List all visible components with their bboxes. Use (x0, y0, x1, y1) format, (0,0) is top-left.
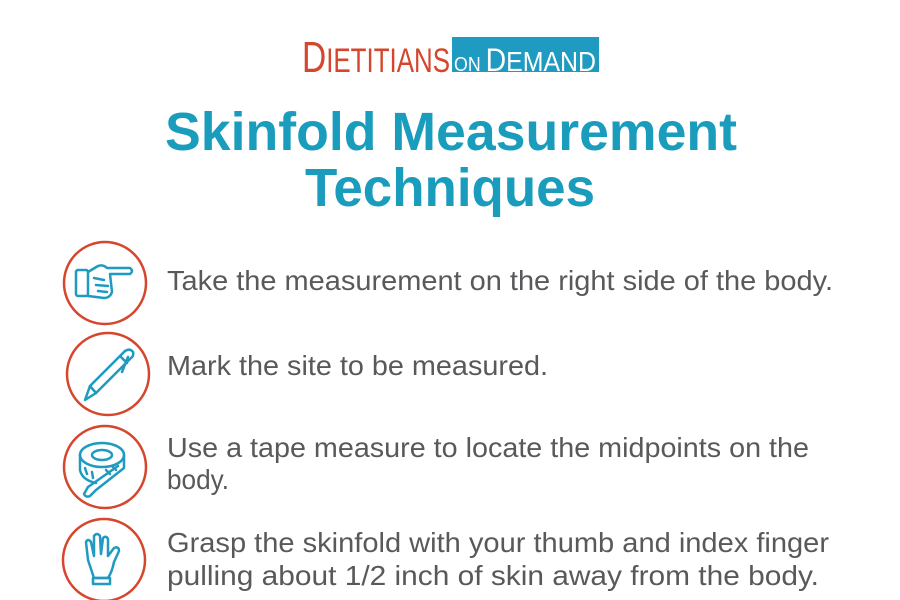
item 2 (67, 333, 548, 415)
logo: on demand box: ON DEMAND (454, 42, 596, 78)
text 4: pulling about 1/2 inch of skin away from the body. (167, 560, 819, 591)
title (165, 102, 737, 218)
text 2: Mark the site to be measured. (167, 350, 548, 381)
text 3: Use a tape measure to locate the midpoints on the (167, 432, 809, 463)
item 1 (64, 242, 833, 324)
item 3 (64, 426, 809, 508)
title: Techniques (305, 158, 595, 218)
text 4 (167, 527, 829, 591)
logo: dietitians: DIETITIANS (302, 33, 450, 82)
logo (302, 33, 599, 82)
title: Skinfold Measurement (165, 102, 737, 162)
text 3: body. (167, 464, 229, 495)
text 1: Take the measurement on the right side of the body. (167, 265, 833, 296)
text 4: Grasp the skinfold with your thumb and index finger (167, 527, 829, 558)
icon: pen (67, 333, 149, 415)
icon: pinching hand (63, 519, 145, 600)
text 3 (167, 432, 809, 495)
icon: tape measure (64, 426, 146, 508)
icon: pointing hand (64, 242, 146, 324)
item 4 (63, 519, 829, 600)
